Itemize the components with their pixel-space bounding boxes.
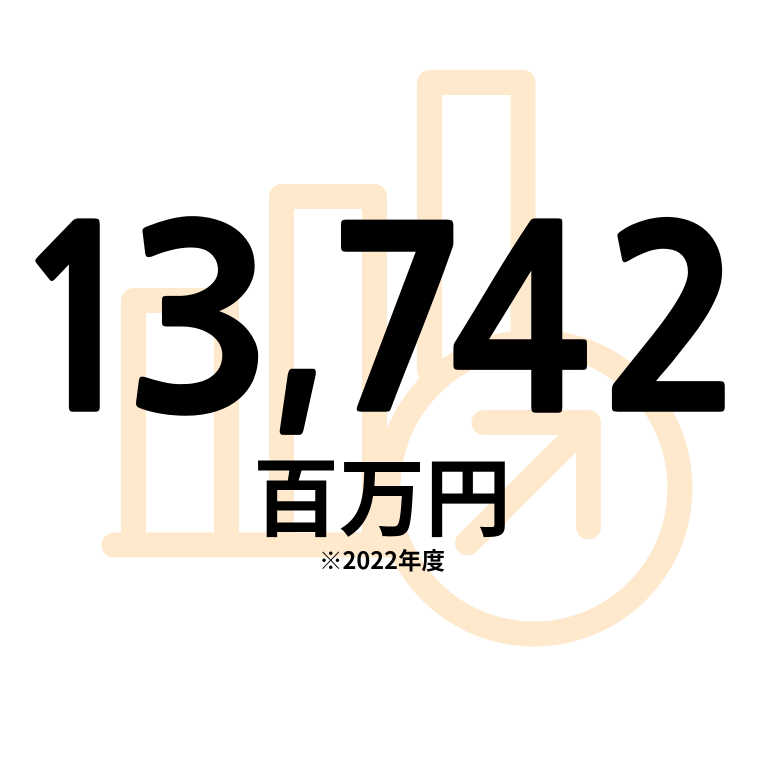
digit 7: 7	[327, 198, 470, 447]
chart bar: short	[134, 300, 226, 544]
growth arrow	[468, 422, 588, 543]
chart bar: medium	[282, 196, 374, 544]
main figure	[12, 133, 745, 448]
unit label: 百万円	[253, 429, 511, 554]
digit 3: 3	[122, 198, 276, 448]
growth circle	[388, 342, 680, 634]
background icon: bar chart with growth arrow	[114, 82, 680, 634]
footnote: ※2022年度	[319, 542, 445, 576]
digit 2: 2	[599, 198, 745, 448]
chart baseline	[114, 532, 395, 558]
chart bar: tall	[430, 82, 523, 370]
digit 1: 1	[12, 199, 148, 448]
comma: ,	[272, 133, 325, 437]
digit 4: 4	[448, 199, 592, 448]
